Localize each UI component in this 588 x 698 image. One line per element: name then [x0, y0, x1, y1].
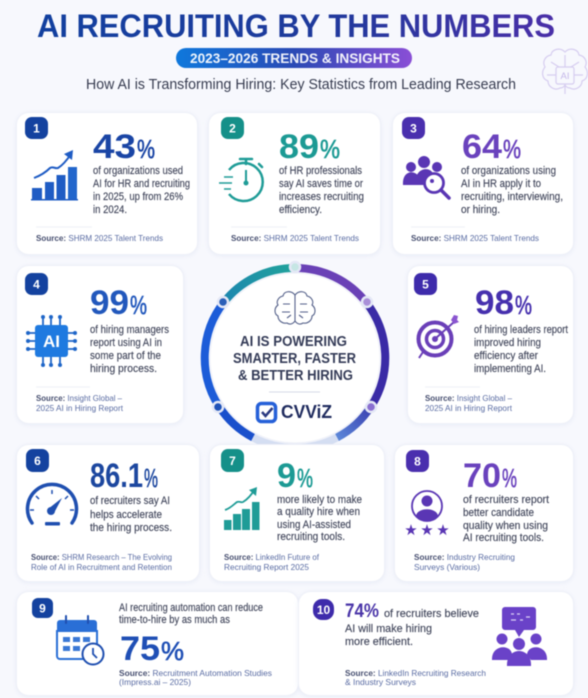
- stat: 64%: [462, 128, 521, 166]
- icon: brain: [275, 292, 315, 324]
- description: [119, 602, 263, 626]
- panel: stat 1: [16, 112, 198, 254]
- icon: target with arrow: [418, 315, 459, 358]
- stat: 74% with text: of recruiters believe: [384, 608, 479, 620]
- description: using AI-assisted: [277, 519, 351, 531]
- icon: AI chip: AI: [43, 332, 60, 351]
- panel: central ring: [205, 262, 385, 448]
- description: of recruiters say AI: [90, 495, 170, 507]
- source: Source: Industry Recruiting: [414, 552, 515, 562]
- badge 5: [414, 273, 437, 295]
- badge 2: [221, 117, 244, 139]
- source: Source: SHRM 2025 Talent Trends: [231, 233, 359, 243]
- description: AI will make hiring: [345, 623, 432, 635]
- subtitle pill: 2023–2026 TRENDS & INSIGHTS: [190, 51, 400, 66]
- logo: CVViZ: CVViZ: [281, 402, 332, 422]
- badge 6: [26, 449, 49, 472]
- panel: stat 4: [16, 266, 184, 424]
- description: of HR professionals: [279, 165, 362, 177]
- description: of hiring leaders report: [474, 324, 568, 336]
- panel: stat 2: [208, 112, 380, 254]
- source: Surveys (Various): [414, 562, 480, 572]
- description: better candidate: [463, 507, 534, 519]
- description: [474, 324, 568, 375]
- badge 7: [221, 449, 244, 472]
- badge 3: [402, 117, 425, 139]
- badge 5: 5: [422, 278, 429, 292]
- description: helps accelerate: [90, 509, 162, 521]
- badge 1: [25, 117, 48, 139]
- source: (Impress.ai – 2025): [119, 677, 191, 687]
- source: [425, 393, 513, 413]
- stat: 75%: [120, 630, 184, 668]
- badge 3: 3: [410, 122, 417, 136]
- description: [90, 495, 172, 534]
- stat: 9%: [277, 457, 313, 495]
- stat: 43%: %: [137, 134, 155, 164]
- source: [345, 668, 486, 687]
- description: the hiring process.: [90, 522, 172, 534]
- stat: 89%: %: [320, 134, 340, 164]
- source: [36, 393, 124, 413]
- description: more likely to make: [277, 494, 362, 506]
- source: Role of AI in Recruitment and Retention: [31, 562, 172, 572]
- tagline: How AI is Transforming Hiring: Key Statistics from Leading Research: [86, 77, 516, 93]
- source: Source: LinkedIn Future of: [224, 552, 320, 562]
- description: quality when using: [463, 520, 548, 532]
- description: [461, 165, 563, 216]
- stat: 9%: %: [297, 463, 313, 493]
- icon: rising bar chart: [31, 150, 78, 200]
- badge 1: 1: [33, 122, 40, 136]
- description: increases recruiting: [279, 191, 364, 203]
- panel: stat 10: [298, 592, 574, 696]
- stat: 43%: 43: [93, 128, 136, 166]
- source: Recruiting Report 2025: [224, 562, 309, 572]
- source: 2025 AI in Hiring Report: [36, 403, 124, 413]
- description: efficiency after: [474, 350, 538, 362]
- description: AI for HR and recruiting: [93, 178, 190, 190]
- source: Source: Insight Global –: [425, 393, 512, 403]
- subtitle pill: [176, 48, 412, 68]
- source: Source: Insight Global –: [36, 393, 122, 403]
- description: efficiency.: [279, 204, 322, 216]
- stat: 98%: [475, 284, 532, 322]
- icon: faint AI brain: [543, 49, 587, 94]
- stat: 75%: 75: [120, 630, 160, 668]
- description: report using AI in: [90, 337, 162, 349]
- stat: 9%: 9: [277, 457, 296, 495]
- description: some part of the: [90, 350, 161, 362]
- central message: AI IS POWERING: [240, 334, 347, 350]
- description: recruiting tools.: [277, 531, 345, 543]
- stat: 64%: 64: [462, 128, 502, 166]
- stat: 99%: %: [130, 290, 147, 320]
- description: time-to-hire by as much as: [119, 614, 230, 626]
- ring nodes: [213, 262, 376, 412]
- stat: 99%: 99: [90, 284, 129, 322]
- panel: stat 3: [392, 112, 574, 254]
- description: AI in HR apply it to: [461, 178, 541, 190]
- title: AI RECRUITING BY THE NUMBERS: [37, 8, 555, 44]
- stat: 86.1%: %: [144, 463, 158, 493]
- description: implementing AI.: [474, 363, 546, 375]
- source: [414, 552, 515, 572]
- stat: 74% with text: [345, 601, 479, 622]
- description: hiring process.: [90, 363, 157, 375]
- icon: teal growth chart: [224, 487, 260, 530]
- icon: faint AI brain: AI: [561, 71, 569, 82]
- icon: candidate with stars: [404, 491, 450, 539]
- source: Source: LinkedIn Recruiting Research: [345, 668, 486, 678]
- description: [93, 165, 190, 216]
- description: AI recruiting tools.: [463, 532, 544, 544]
- logo: CVViZ: [258, 402, 332, 422]
- panel: stat 5: [408, 266, 574, 424]
- description: in 2025, up from 26%: [93, 191, 183, 203]
- panel: stat 8: [394, 444, 574, 582]
- stat: 99%: [90, 284, 147, 322]
- badge 9: [32, 598, 53, 618]
- description: [279, 165, 364, 216]
- central message: SMARTER, FASTER: [233, 351, 356, 367]
- icon: calendar with clock: [57, 616, 104, 664]
- icon: candidate with stars: ★: [436, 522, 450, 539]
- panel: stat 7: [210, 444, 384, 582]
- description: [463, 494, 549, 544]
- description: of organizations used: [93, 165, 183, 177]
- icon: candidate with stars: ★: [420, 522, 434, 539]
- badge 4: 4: [33, 278, 40, 292]
- stat: 43%: [93, 128, 155, 166]
- badge 4: [25, 273, 48, 295]
- badge 7: 7: [229, 454, 236, 468]
- description: [345, 623, 432, 648]
- description: in 2024.: [93, 204, 127, 216]
- icon: people with magnifier: [403, 156, 449, 198]
- icon: speedometer: [27, 484, 76, 526]
- description: more efficient.: [345, 636, 413, 648]
- source: Source: SHRM Research – The Evolving: [31, 552, 172, 562]
- source: Source: Recruitment Automation Studies: [119, 668, 272, 678]
- description: of recruiters report: [463, 494, 549, 506]
- stat: 70%: %: [502, 463, 517, 493]
- description: [90, 324, 169, 375]
- source: 2025 AI in Hiring Report: [425, 403, 513, 413]
- stat: 98%: %: [515, 290, 532, 320]
- description: of hiring managers: [90, 324, 169, 336]
- stat: 64%: %: [503, 134, 521, 164]
- central message: [233, 334, 356, 384]
- description: say AI saves time or: [279, 178, 363, 190]
- source: [224, 552, 320, 572]
- badge 8: 8: [414, 454, 421, 468]
- stat: 98%: 98: [475, 284, 514, 322]
- stat: 70%: 70: [463, 457, 501, 495]
- stat: 75%: %: [161, 636, 184, 666]
- badge 10: [313, 599, 334, 620]
- icon: candidate with stars: ★: [404, 522, 418, 539]
- source: Source: SHRM 2025 Talent Trends: [36, 233, 163, 243]
- source: [119, 668, 272, 687]
- badge 10: 10: [317, 603, 330, 617]
- icon: stopwatch: [219, 159, 263, 201]
- icon: AI chip: [26, 315, 77, 367]
- stat: 89%: [279, 128, 340, 166]
- badge 2: 2: [229, 122, 236, 136]
- panel: stat 9: [16, 592, 298, 696]
- central message: & BETTER HIRING: [238, 368, 353, 384]
- description: recruiting, interviewing,: [461, 191, 563, 203]
- stat: 89%: 89: [279, 128, 319, 166]
- description: a quality hire when: [277, 506, 360, 518]
- description: improved hiring: [474, 337, 541, 349]
- source: & Industry Surveys: [345, 677, 416, 687]
- icon: team with speech bubble: [492, 607, 547, 666]
- badge 9: 9: [39, 602, 46, 616]
- description: AI recruiting automation can reduce: [119, 602, 263, 614]
- description: of organizations using: [461, 165, 556, 177]
- source: [31, 552, 172, 572]
- description: [277, 494, 362, 543]
- source: Source: SHRM 2025 Talent Trends: [411, 233, 539, 243]
- badge 6: 6: [34, 454, 41, 468]
- panel: stat 6: [16, 444, 200, 582]
- stat: 86.1%: 86.1: [90, 457, 143, 495]
- stat: 74% with text: 74%: [345, 601, 379, 622]
- description: or hiring.: [461, 204, 500, 216]
- ring segments: [205, 268, 385, 448]
- badge 8: [406, 450, 429, 472]
